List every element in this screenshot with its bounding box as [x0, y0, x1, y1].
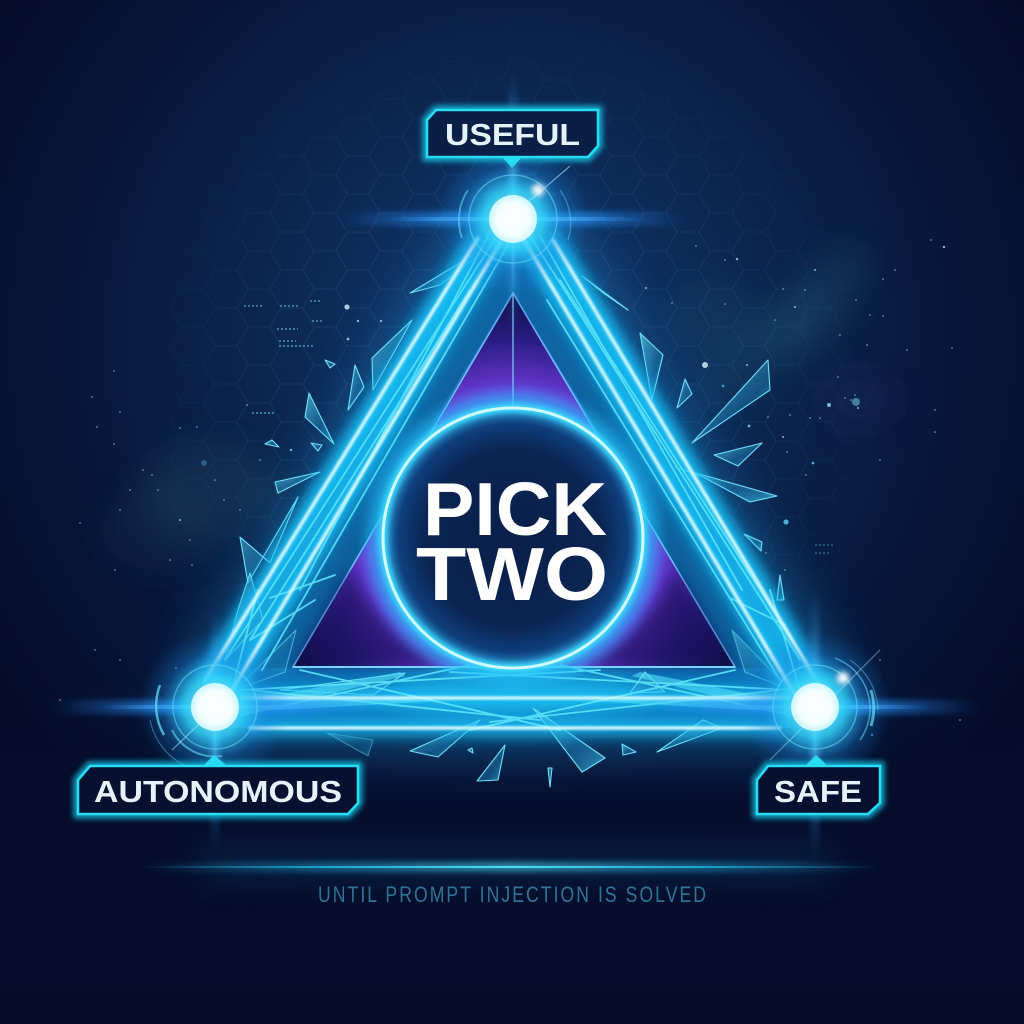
bright beam cores	[205, 238, 825, 728]
footer glow	[200, 845, 830, 881]
ambient triangle glow	[215, 219, 815, 707]
beam wide glow	[205, 238, 825, 728]
central ring and disc	[367, 392, 659, 684]
center title	[416, 467, 608, 616]
small data readouts right	[815, 545, 835, 553]
glass shards around triangle	[225, 240, 790, 787]
small data readouts left	[244, 301, 323, 413]
label: safe: SAFE	[774, 774, 862, 809]
node: safe	[739, 631, 891, 783]
crystal ribbons on base	[240, 672, 790, 712]
nebula right	[660, 227, 900, 431]
starfield	[59, 239, 961, 736]
base band glow	[240, 660, 790, 728]
node: autonomous	[139, 631, 291, 783]
node: useful	[437, 143, 589, 295]
label: autonomous: AUTONOMOUS	[94, 774, 342, 809]
triangle band fill	[205, 219, 825, 728]
label: useful: USEFUL	[445, 117, 580, 152]
inner base line	[293, 666, 735, 668]
label: autonomous	[78, 755, 358, 814]
hexagon grid	[174, 64, 842, 584]
footer caption: UNTIL PROMPT INJECTION IS SOLVED	[318, 883, 706, 908]
center title: PICK	[423, 467, 607, 551]
footer divider line	[140, 862, 880, 872]
label: useful	[427, 110, 598, 168]
inner triangle with purple aura	[293, 293, 735, 667]
flares	[50, 70, 980, 860]
center title: TWO	[416, 532, 608, 616]
crystal beam strands	[225, 232, 812, 730]
nebula left	[100, 445, 280, 570]
lower dark triangle corners	[293, 570, 735, 667]
label: safe	[757, 755, 880, 814]
